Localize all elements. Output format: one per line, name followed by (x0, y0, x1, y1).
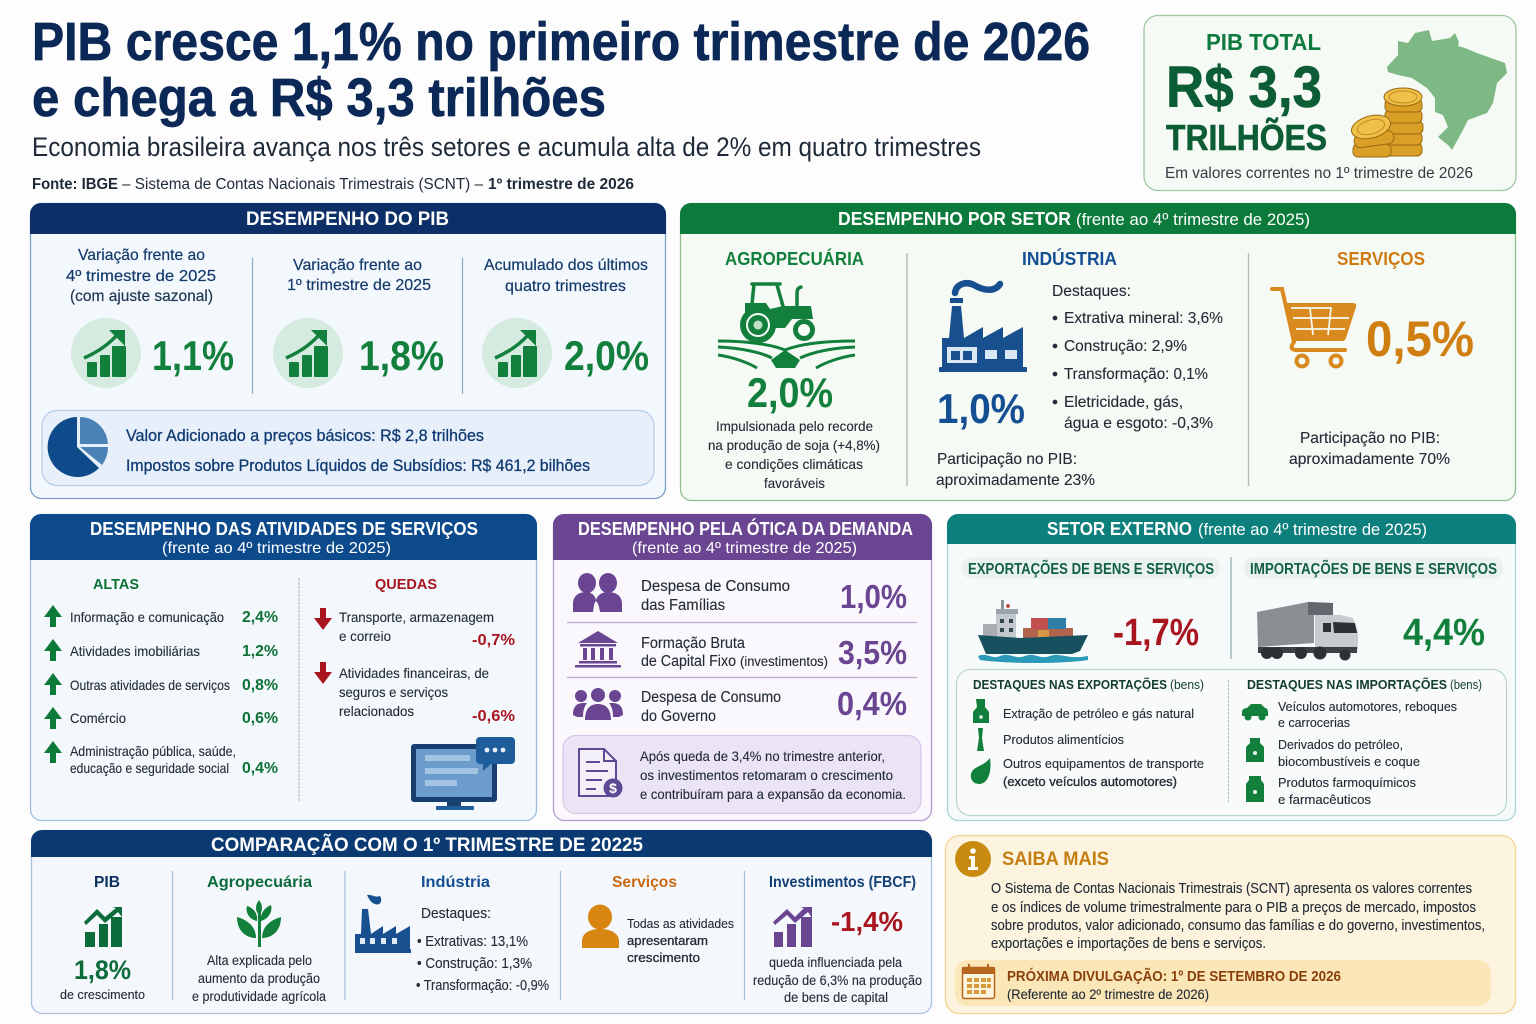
highlights: imports: Veículos automotores, reboques (1278, 699, 1457, 714)
column: indústria: Destaques: (421, 906, 491, 922)
highlights: imports: Derivados do petróleo, (1278, 737, 1403, 752)
row: consumo das famílias (573, 573, 907, 615)
list: altas: 2,4% (242, 609, 278, 626)
icon: tractor and field (718, 284, 855, 368)
row: consumo do governo (573, 685, 907, 725)
exports: -1,7% (1113, 612, 1199, 654)
column: PIB (60, 874, 145, 1002)
callout: composição do PIB: Valor Adicionado a preços básicos: R$ 2,8 trilhões (126, 427, 484, 445)
row: consumo das famílias: 1,0% (840, 578, 907, 615)
sector: indústria: aproximadamente 23% (936, 472, 1095, 489)
column: indústria: • Transformação: -0,9% (416, 978, 549, 994)
title (32, 12, 1090, 128)
row: consumo do governo: Despesa de Consumo (641, 689, 781, 706)
panel: comparação com o 1º trimestre (31, 830, 932, 1014)
highlights list: Transformação: 0,1% (1064, 366, 1208, 383)
column: investimentos: redução de 6,3% na produção (753, 973, 922, 988)
metric: 4º trimestre: Variação frente ao (78, 247, 205, 264)
icon: growth chart (84, 907, 122, 947)
callout: investimentos (563, 736, 921, 814)
metric: acumulado: 2,0% (564, 332, 649, 379)
icon: factory (939, 283, 1027, 372)
title: PIB cresce 1,1% no primeiro trimestre de 2026 (32, 12, 1090, 72)
sector: agropecuária (708, 248, 880, 491)
metric: 4º trimestre: 1,1% (152, 332, 234, 379)
callout: próxima divulgação: PRÓXIMA DIVULGAÇÃO: 1º DE SETEMBRO DE 2026 (1007, 967, 1341, 985)
header bar: DESEMPENHO POR SETOR (838, 208, 1071, 229)
subtitle: Economia brasileira avança nos três setores e acumula alta de 2% em quatro trimestres (32, 132, 981, 162)
column: investimentos: queda influenciada pela (769, 955, 902, 970)
header bar: DESEMPENHO DAS ATIVIDADES DE SERVIÇOS (90, 518, 478, 539)
callout: composição do PIB (42, 410, 654, 486)
column: serviços: Serviços (612, 874, 677, 891)
sector: indústria: INDÚSTRIA (1022, 248, 1117, 269)
source line: 1º trimestre de 2026 (488, 176, 634, 193)
panel: desempenho do PIB (30, 203, 666, 498)
column: indústria (355, 874, 549, 994)
imports (1244, 557, 1503, 660)
header bar (680, 203, 1516, 234)
list: quedas: e correio (339, 628, 391, 644)
highlights: exports (971, 677, 1204, 789)
column: investimentos (753, 874, 922, 1005)
row: formação bruta de capital fixo (575, 631, 907, 671)
source line: Fonte: IBGE (32, 176, 118, 193)
list: quedas (314, 576, 515, 725)
row: consumo do governo: do Governo (641, 708, 716, 725)
highlights list: Destaques: (1052, 283, 1131, 300)
exports (962, 557, 1220, 663)
metric: 1º trimestre: 1,8% (359, 332, 444, 379)
icon: shopping cart (1272, 289, 1356, 366)
sector: agropecuária: na produção de soja (+4,8%) (708, 437, 880, 453)
highlights: exports: Extração de petróleo e gás natural (1003, 706, 1194, 721)
metric: 1º trimestre: Variação frente ao (293, 257, 422, 274)
panel: PIB total (1144, 16, 1516, 190)
row: formação bruta de capital fixo: Formação Bruta (641, 635, 745, 652)
callout: próxima divulgação: (Referente ao 2º trimestre de 2026) (1007, 987, 1209, 1002)
list: altas: 0,8% (242, 677, 278, 694)
header bar: DESEMPENHO DO PIB (246, 209, 449, 230)
text block: O Sistema de Contas Nacionais Trimestrais (SCNT) apresenta os valores correntes (991, 881, 1472, 897)
panel: atividades de serviços (30, 514, 537, 820)
metric: acumulado (482, 257, 649, 388)
icon: pie chart (48, 417, 108, 477)
highlights: exports: Outros equipamentos de transporte (1003, 756, 1204, 771)
list: altas (44, 576, 278, 777)
header bar: (frente ao 4º trimestre de 2025) (1076, 210, 1310, 229)
icon: info (955, 841, 991, 877)
row: formação bruta de capital fixo: 3,5% (838, 634, 907, 671)
sector: agropecuária: favoráveis (764, 475, 825, 491)
sector: serviços: 0,5% (1366, 311, 1474, 367)
header bar: DESEMPENHO PELA ÓTICA DA DEMANDA (578, 518, 913, 539)
highlights list: Eletricidade, gás, (1064, 394, 1183, 411)
column: serviços: crescimento (627, 950, 700, 965)
highlights: imports: e carrocerias (1278, 715, 1350, 730)
header bar (30, 203, 666, 234)
sector: agropecuária: Impulsionada pelo recorde (716, 418, 873, 434)
value: R$ 3,3 trilhões (1166, 55, 1327, 158)
callout: investimentos: e contribuíram para a expansão da economia. (640, 786, 906, 802)
list: quedas: -0,7% (472, 632, 515, 649)
header bar (553, 514, 932, 560)
list: altas: Informação e comunicação (70, 609, 224, 625)
list: quedas: Transporte, armazenagem (339, 609, 494, 625)
panel: setor externo (947, 514, 1516, 820)
highlights list (1052, 283, 1223, 432)
list: altas: educação e seguridade social (70, 760, 229, 776)
header bar (947, 514, 1516, 544)
sector: indústria: 1,0% (937, 385, 1025, 432)
column: PIB: 1,8% (74, 955, 131, 985)
list: quedas: seguros e serviços (339, 684, 448, 700)
highlights: exports: (exceto veículos automotores) (1003, 774, 1177, 789)
list: quedas: QUEDAS (375, 576, 437, 593)
header bar: COMPARAÇÃO COM O 1º TRIMESTRE DE 20225 (211, 834, 643, 856)
column: PIB: PIB (94, 874, 120, 891)
highlights list: Extrativa mineral: 3,6% (1064, 310, 1223, 327)
heading: SAIBA MAIS (1002, 849, 1109, 870)
metric: acumulado: Acumulado dos últimos (484, 257, 648, 274)
sector: serviços (1272, 249, 1474, 468)
list: altas: Atividades imobiliárias (70, 643, 200, 659)
text block: e os índices de volume trimestralmente para o PIB a preços de mercado, impostos (991, 900, 1476, 916)
panel: desempenho por setor (680, 203, 1516, 500)
icon: person (582, 904, 619, 948)
row: consumo do governo: 0,4% (837, 685, 907, 722)
highlights: exports: DESTAQUES NAS EXPORTAÇÕES (973, 677, 1167, 692)
highlights list: Construção: 2,9% (1064, 338, 1187, 355)
highlights: imports: Produtos farmoquímicos (1278, 775, 1416, 790)
value: R$ 3,3 trilhões: R$ 3,3 (1166, 55, 1322, 120)
callout: investimentos: Após queda de 3,4% no trimestre anterior, (640, 748, 885, 764)
sector: agropecuária: AGROPECUÁRIA (725, 248, 864, 269)
sector: serviços: SERVIÇOS (1337, 249, 1425, 269)
column: investimentos: Investimentos (FBCF) (769, 874, 916, 891)
column: indústria: • Extrativas: 13,1% (417, 934, 528, 950)
column: indústria: Indústria (421, 874, 490, 891)
label: PIB total: PIB TOTAL (1206, 29, 1321, 55)
sector: serviços: Participação no PIB: (1300, 430, 1440, 447)
header bar: (frente ao 4º trimestre de 2025) (162, 540, 391, 557)
panel: ótica da demanda (553, 514, 932, 820)
sector: indústria: Participação no PIB: (937, 451, 1077, 468)
highlights: imports (1242, 677, 1482, 807)
source line (32, 176, 634, 193)
row: consumo das famílias: Despesa de Consumo (641, 578, 790, 595)
icon: calendar (962, 964, 995, 998)
icon: investment chart (773, 907, 812, 947)
text block: sobre produtos, valor adicionado, consumo das famílias e do governo, investimentos, (991, 918, 1485, 934)
header bar: (frente ao 4º trimestre de 2025) (632, 540, 857, 557)
column: serviços (582, 874, 734, 965)
icon: coins (1349, 88, 1423, 157)
column: investimentos: -1,4% (831, 906, 903, 937)
box: destaques (956, 670, 1506, 816)
header bar (31, 830, 932, 857)
list: quedas: -0,6% (472, 708, 515, 725)
panel: saiba mais (946, 836, 1516, 1014)
icon: plant (237, 900, 281, 947)
highlights: imports: (bens) (1450, 677, 1482, 692)
icon: Brazil map (1387, 30, 1507, 150)
column: serviços: apresentaram (627, 933, 708, 948)
list: quedas: relacionados (339, 703, 414, 719)
column: agropecuária: Alta explicada pelo (207, 953, 312, 968)
imports: 4,4% (1403, 612, 1485, 654)
text block (991, 881, 1485, 952)
list: altas: 1,2% (242, 643, 278, 660)
icon: monitor with chat bubble (411, 737, 515, 810)
value: R$ 3,3 trilhões: TRILHÕES (1166, 116, 1327, 158)
header bar: SETOR EXTERNO (1047, 518, 1192, 539)
list: quedas: Atividades financeiras, de (339, 665, 489, 681)
highlights: imports: e farmacêuticos (1278, 792, 1372, 807)
list: altas: 0,4% (242, 760, 278, 777)
callout: composição do PIB: Impostos sobre Produtos Líquidos de Subsídios: R$ 461,2 bilhões (126, 457, 590, 475)
icon: truck (1257, 602, 1358, 660)
list: altas: Outras atividades de serviços (70, 677, 230, 693)
callout: investimentos: os investimentos retomaram o crescimento (640, 767, 893, 783)
column: agropecuária: Agropecuária (207, 874, 312, 891)
header bar: (frente ao 4º trimestre de 2025) (1198, 520, 1427, 539)
highlights list: água e esgoto: -0,3% (1064, 415, 1213, 432)
row: formação bruta de capital fixo: de Capital Fixo (641, 653, 736, 670)
highlights: exports: Produtos alimentícios (1003, 732, 1124, 747)
exports: EXPORTAÇÕES DE BENS E SERVIÇOS (968, 558, 1214, 578)
column: agropecuária (192, 874, 326, 1004)
row: consumo das famílias: das Famílias (641, 597, 725, 614)
list: altas: ALTAS (93, 576, 139, 593)
sector: indústria (936, 248, 1223, 489)
metric: 1º trimestre: 1º trimestre de 2025 (287, 277, 431, 294)
highlights: exports: (bens) (1170, 677, 1204, 692)
callout: próxima divulgação (955, 960, 1491, 1006)
column: indústria: • Construção: 1,3% (417, 956, 532, 972)
list: altas: Comércio (70, 710, 126, 726)
source line: – Sistema de Contas Nacionais Trimestrais (SCNT) – (122, 176, 483, 193)
list: altas: 0,6% (242, 710, 278, 727)
caption: Em valores correntes no 1º trimestre de 2026 (1165, 165, 1473, 182)
column: agropecuária: aumento da produção (198, 971, 320, 986)
sector: agropecuária: e condições climáticas (725, 456, 863, 472)
metric: acumulado: quatro trimestres (505, 278, 626, 295)
text block: exportações e importações de bens e serviços. (991, 936, 1266, 952)
row: formação bruta de capital fixo: (investimentos) (740, 654, 828, 669)
metric: 4º trimestre: 4º trimestre de 2025 (66, 268, 216, 285)
metric: 1º trimestre (273, 257, 444, 388)
title: e chega a R$ 3,3 trilhões (32, 68, 606, 128)
sector: agropecuária: 2,0% (747, 369, 833, 416)
metric: 4º trimestre: (com ajuste sazonal) (70, 288, 213, 305)
metric: 4º trimestre (66, 247, 234, 388)
column: investimentos: de bens de capital (784, 990, 888, 1005)
icon: factory (355, 895, 411, 953)
column: serviços: Todas as atividades (627, 916, 734, 931)
sector: serviços: aproximadamente 70% (1289, 451, 1450, 468)
column: PIB: de crescimento (60, 987, 145, 1002)
column: agropecuária: e produtividade agrícola (192, 989, 326, 1004)
icon: document with dollar: $ (609, 780, 617, 796)
icon: document with dollar (579, 749, 622, 798)
highlights: imports: DESTAQUES NAS IMPORTAÇÕES (1247, 677, 1447, 692)
header bar (30, 514, 537, 560)
highlights: imports: biocombustíveis e coque (1278, 754, 1420, 769)
list: altas: Administração pública, saúde, (70, 743, 236, 759)
icon: cargo ship (978, 600, 1088, 663)
